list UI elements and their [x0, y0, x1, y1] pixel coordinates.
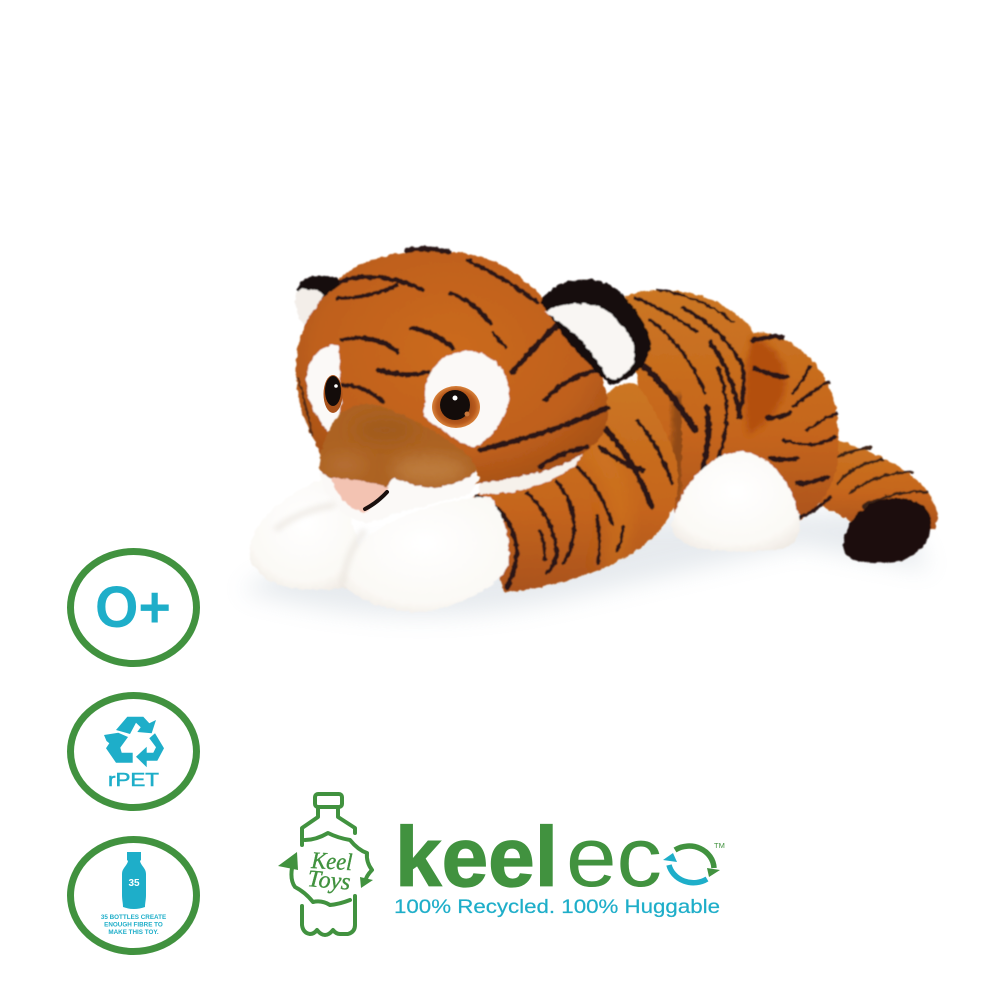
muzzle and nose	[320, 404, 480, 523]
front body	[470, 365, 695, 592]
right eye	[432, 386, 480, 428]
bottles badge	[70, 840, 196, 952]
head	[296, 249, 608, 485]
Keel Toys wordmark: Toys	[306, 866, 352, 896]
logo arrows	[278, 852, 373, 888]
rPET badge	[70, 696, 196, 808]
recycling letter o	[663, 846, 720, 883]
head stripes	[298, 249, 607, 467]
tail	[820, 438, 938, 563]
bottle number: 35	[128, 878, 140, 889]
Keel Toys wordmark: Keel	[310, 848, 353, 876]
left eye	[324, 375, 342, 413]
right ear	[540, 279, 651, 385]
bottles caption: MAKE THIS TOY.	[108, 929, 159, 936]
paw shading	[275, 505, 365, 585]
bottles caption: 35 BOTTLES CREATE	[101, 914, 166, 921]
chin fluff	[478, 430, 600, 494]
front white paws	[250, 478, 509, 612]
bottles caption: ENOUGH FIBRE TO	[104, 921, 163, 928]
trademark: TM	[714, 841, 725, 850]
eco wordmark: ec	[566, 810, 662, 904]
keeleco logo	[394, 810, 725, 918]
ground shadow	[240, 510, 930, 615]
rPET label: rPET	[108, 770, 159, 790]
mouth	[365, 492, 387, 509]
bottles caption	[101, 914, 166, 936]
icon: bottle	[122, 852, 146, 909]
keel toys bottle logo	[278, 794, 373, 935]
age badge	[70, 552, 196, 664]
tagline: 100% Recycled. 100% Huggable	[394, 896, 720, 918]
left ear	[295, 276, 340, 325]
hind white paw	[672, 452, 800, 551]
keel wordmark: keel	[395, 810, 558, 904]
Keel Toys wordmark	[306, 848, 353, 896]
eye patches	[307, 345, 509, 447]
rear body and haunch	[625, 290, 838, 530]
icon: recycling arrows	[104, 717, 164, 767]
age text: O+	[95, 575, 171, 640]
tiger plush toy	[250, 249, 938, 612]
